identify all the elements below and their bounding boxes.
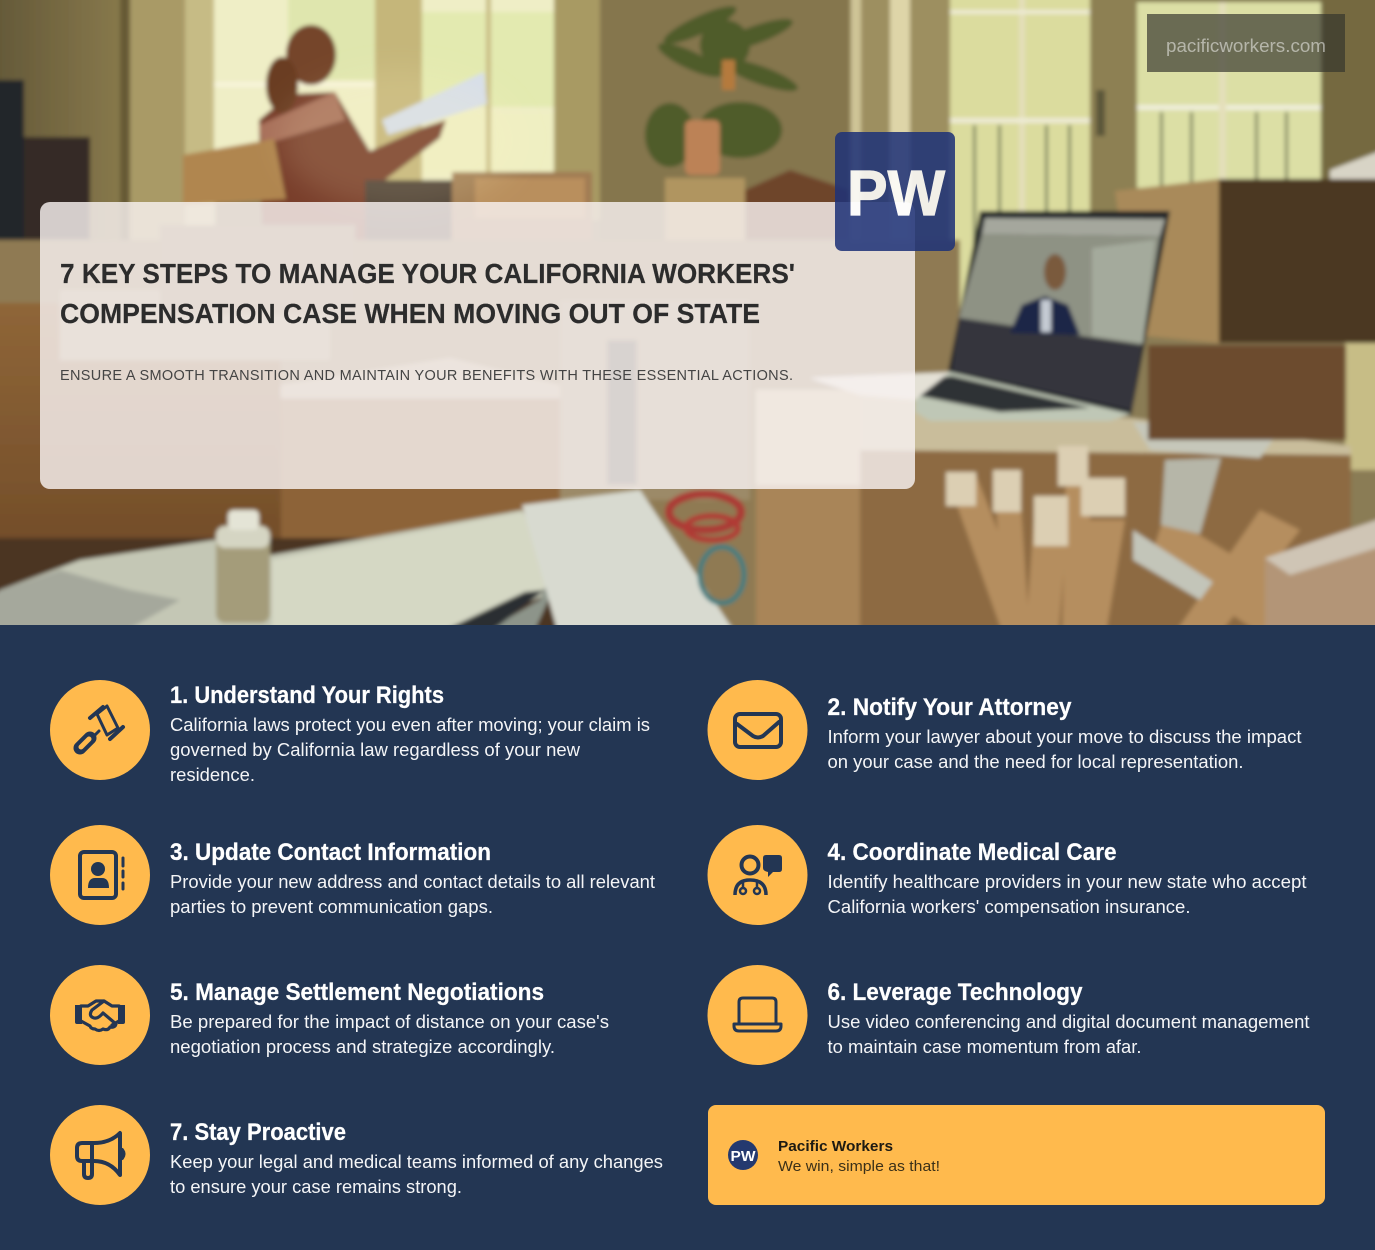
icon: laptop [708, 965, 808, 1065]
step 6: leverage technology [708, 965, 1310, 1065]
icon: megaphone [50, 1105, 150, 1205]
hero photo: moving scene [0, 0, 1375, 685]
step 7: stay proactive [50, 1105, 663, 1205]
heading: 6. Leverage Technology [828, 979, 1083, 1006]
icon: PW logo circle: PW [730, 1148, 756, 1165]
website badge: pacificworkers.com [1166, 36, 1326, 56]
body text [170, 1152, 663, 1197]
body text [828, 1012, 1310, 1057]
body text: parties to prevent communication gaps. [170, 897, 493, 917]
body text [170, 715, 650, 785]
panel: steps background [0, 625, 1375, 1250]
body text [828, 727, 1302, 772]
step 2: notify your attorney [708, 680, 1302, 780]
body text [170, 872, 655, 917]
body text: to ensure your case remains strong. [170, 1177, 462, 1197]
panel: title card [40, 202, 915, 489]
title: 7 KEY STEPS TO MANAGE YOUR CALIFORNIA WORKERS' [60, 258, 795, 289]
icon: envelope [708, 680, 808, 780]
icon: address book [50, 825, 150, 925]
icon: handshake [50, 965, 150, 1065]
step 1: understand your rights [50, 680, 650, 785]
body text: negotiation process and strategize accordingly. [170, 1037, 555, 1057]
heading: 4. Coordinate Medical Care [828, 839, 1116, 866]
body text: on your case and the need for local representation. [828, 752, 1244, 772]
panel: footer brand card [708, 1105, 1325, 1205]
heading: 5. Manage Settlement Negotiations [170, 979, 544, 1006]
heading: 1. Understand Your Rights [170, 682, 444, 709]
body text: Use video conferencing and digital document management [828, 1012, 1310, 1032]
step 4: coordinate medical care [708, 825, 1306, 925]
body text [828, 872, 1306, 917]
tagline: We win, simple as that! [778, 1158, 940, 1175]
icon: PW logo circle [728, 1140, 758, 1170]
heading: 7. Stay Proactive [170, 1119, 346, 1146]
body text: Keep your legal and medical teams informed of any changes [170, 1152, 663, 1172]
title [60, 258, 795, 329]
heading: 3. Update Contact Information [170, 839, 491, 866]
body text: Inform your lawyer about your move to discuss the impact [828, 727, 1302, 747]
title: COMPENSATION CASE WHEN MOVING OUT OF STATE [60, 298, 760, 329]
website badge [1147, 14, 1345, 72]
body text: governed by California law regardless of your new [170, 740, 581, 760]
step 5: manage settlement negotiations [50, 965, 609, 1065]
heading: 2. Notify Your Attorney [828, 694, 1072, 721]
icon: gavel [50, 680, 150, 780]
body text: Be prepared for the impact of distance on your case's [170, 1012, 609, 1032]
body text [170, 1012, 609, 1057]
body text: Provide your new address and contact details to all relevant [170, 872, 655, 892]
step 3: update contact information [50, 825, 655, 925]
logo: PW tile [835, 132, 955, 251]
subtitle: ENSURE A SMOOTH TRANSITION AND MAINTAIN YOUR BENEFITS WITH THESE ESSENTIAL ACTIONS. [60, 368, 793, 384]
logo: PW tile: PW [847, 157, 946, 229]
body text: Identify healthcare providers in your new state who accept [828, 872, 1306, 892]
body text: to maintain case momentum from afar. [828, 1037, 1142, 1057]
brand name: Pacific Workers [778, 1138, 893, 1155]
icon: doctor with speech bubble [708, 825, 808, 925]
body text: residence. [170, 765, 255, 785]
body text: California laws protect you even after moving; your claim is [170, 715, 650, 735]
body text: California workers' compensation insurance. [828, 897, 1190, 917]
